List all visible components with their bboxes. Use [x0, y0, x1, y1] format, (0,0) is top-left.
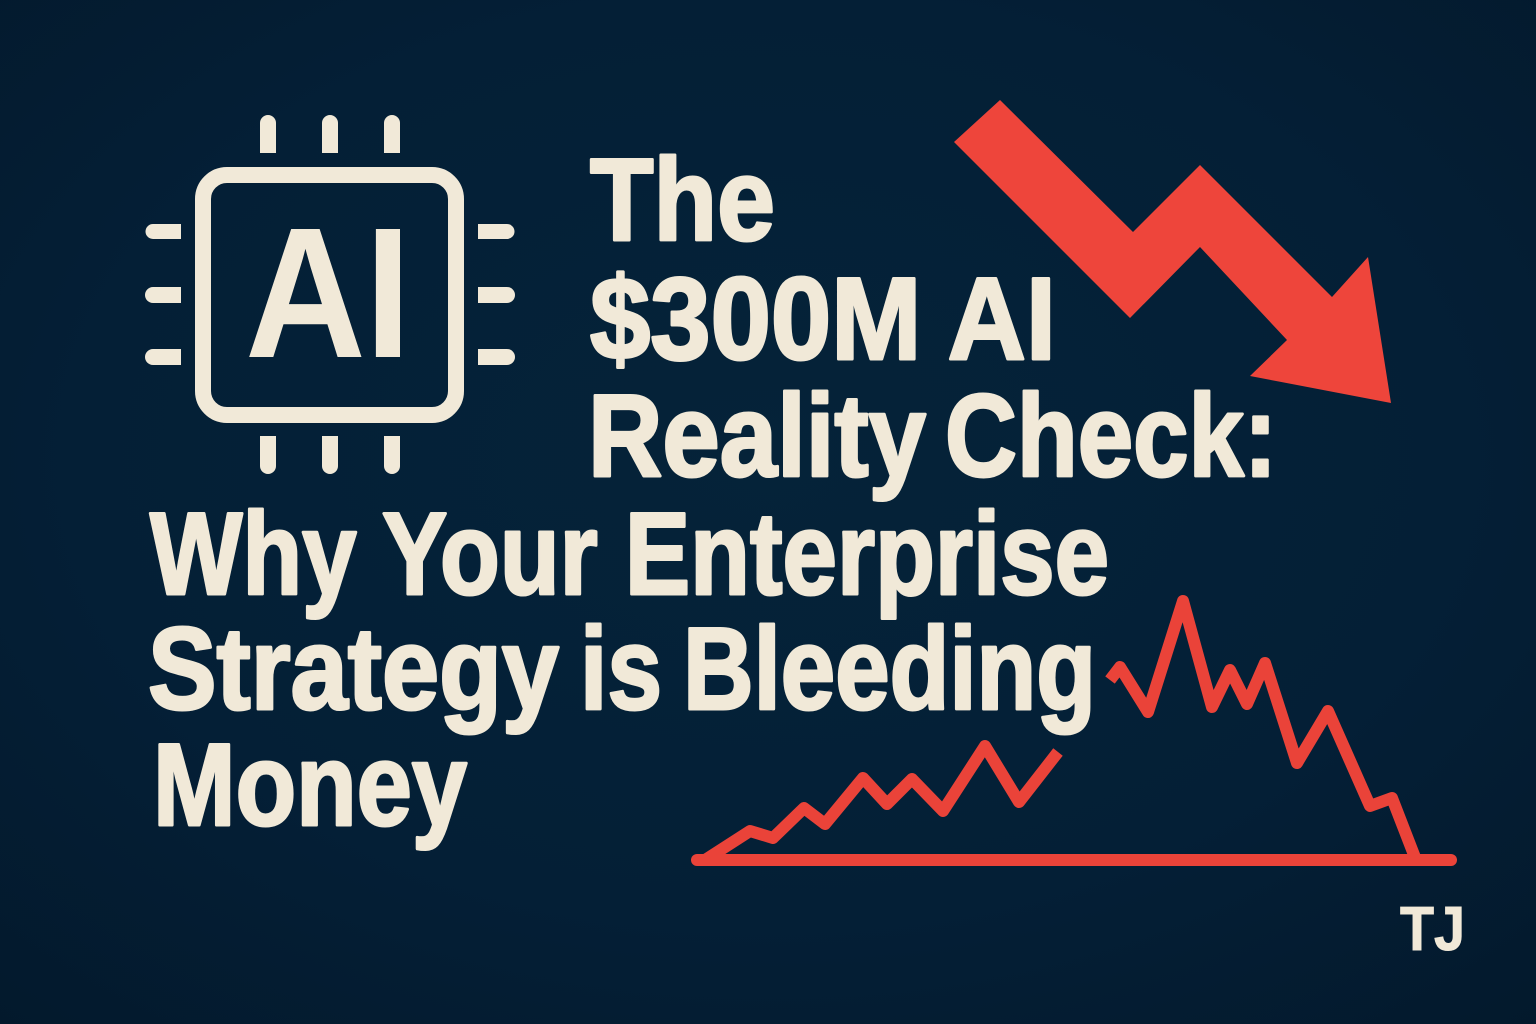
icon: AI chip: I — [365, 190, 411, 397]
signature: TJ: TJ — [1400, 895, 1465, 964]
arrow: falling red arrow — [954, 100, 1391, 403]
title: is — [580, 603, 662, 734]
title: Strategy — [148, 603, 559, 734]
title: The — [590, 134, 775, 265]
title: Check: — [945, 370, 1277, 501]
title: Reality — [588, 370, 926, 501]
line chart: rise and collapse — [697, 601, 1451, 860]
title: Money — [153, 719, 467, 850]
title: Why Your Enterprise — [150, 488, 1109, 619]
icon: AI chip: A — [245, 190, 366, 397]
title: Bleeding — [683, 603, 1096, 734]
icon: AI chip — [145, 115, 515, 474]
title — [148, 134, 1277, 850]
title: $300M AI — [590, 253, 1056, 384]
